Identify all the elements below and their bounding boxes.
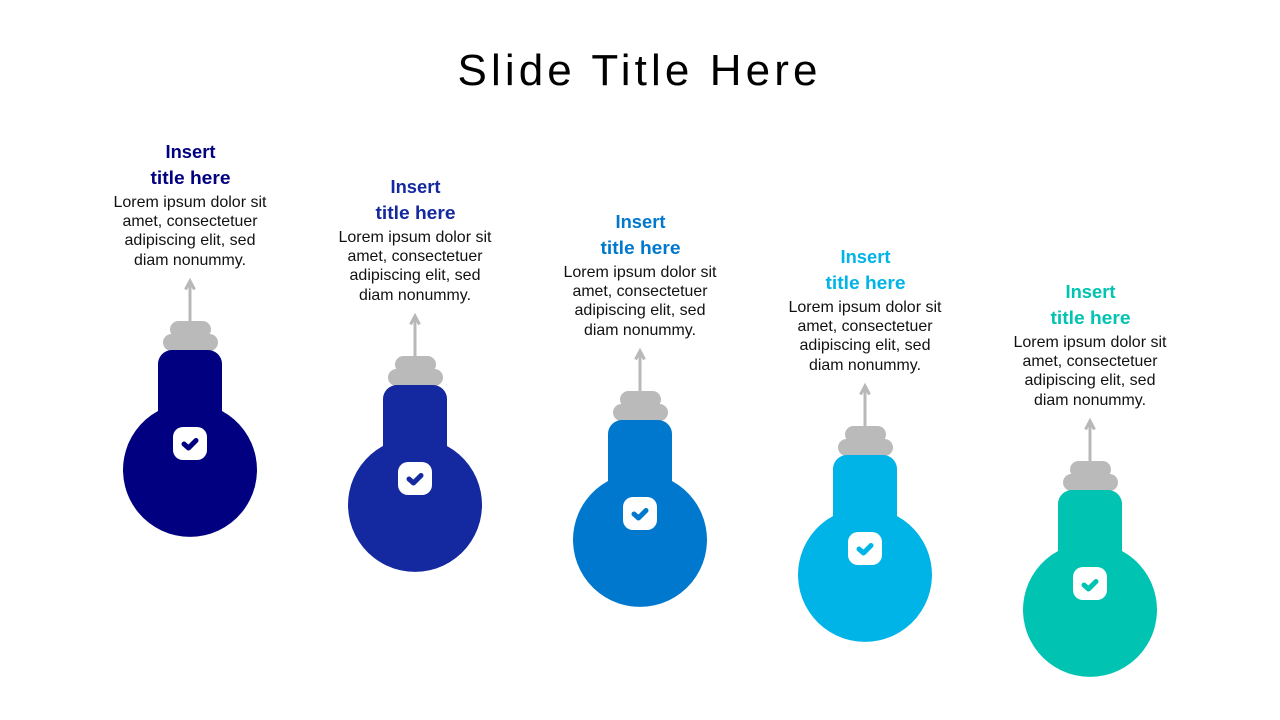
- icon: check badge 5: [1073, 567, 1107, 600]
- bulb cap 5: [1063, 461, 1118, 491]
- text block 3: [564, 264, 717, 339]
- arrow 4: [860, 386, 870, 427]
- bulb cap 2: [388, 356, 443, 386]
- text block 2: amet, consectetuer: [348, 248, 483, 265]
- bulb body 4: [798, 455, 932, 642]
- text block 3: Lorem ipsum dolor sit: [564, 264, 717, 281]
- text block 4: adipiscing elit, sed: [800, 337, 930, 354]
- text block 1: Lorem ipsum dolor sit: [114, 194, 267, 211]
- text block 2: adipiscing elit, sed: [350, 267, 480, 284]
- bulb body 3: [573, 420, 707, 607]
- text block 5: Lorem ipsum dolor sit: [1014, 334, 1167, 351]
- column 2: royal blue bulb: [338, 177, 492, 572]
- text block 4: diam nonummy.: [809, 357, 921, 374]
- heading 5: Insert: [1066, 282, 1116, 302]
- icon: check badge 3: [623, 497, 657, 530]
- column 5: teal bulb: [1014, 282, 1167, 677]
- heading 2: Insert: [390, 177, 440, 197]
- icon: check badge 4: [848, 532, 882, 565]
- text block 4: amet, consectetuer: [798, 318, 933, 335]
- arrow 5: [1086, 421, 1094, 462]
- icon: check badge 2: [398, 462, 432, 495]
- heading 3: [600, 212, 680, 258]
- heading 2: [376, 177, 456, 223]
- text block 5: amet, consectetuer: [1022, 353, 1158, 370]
- text block 2: Lorem ipsum dolor sit: [338, 229, 492, 246]
- arrow 1: [186, 281, 194, 322]
- text block 4: [788, 299, 942, 374]
- text block 5: [1014, 334, 1167, 409]
- text block 5: diam nonummy.: [1034, 392, 1146, 409]
- bulb body 5: [1023, 490, 1157, 677]
- heading 1: Insert: [166, 142, 216, 162]
- text block 2: diam nonummy.: [359, 287, 471, 304]
- text block 4: Lorem ipsum dolor sit: [788, 299, 942, 316]
- heading 1: title here: [150, 168, 230, 188]
- heading 3: title here: [600, 238, 680, 258]
- column 4: sky blue bulb: [788, 247, 942, 642]
- text block 5: adipiscing elit, sed: [1024, 372, 1156, 389]
- column 3: mid blue bulb: [564, 212, 717, 607]
- text block 1: amet, consectetuer: [122, 213, 258, 230]
- bulb body 2: [348, 385, 482, 572]
- heading 5: title here: [1050, 308, 1130, 328]
- heading 2: title here: [376, 203, 456, 223]
- bulb cap 3: [613, 391, 668, 421]
- arrow 3: [636, 351, 644, 392]
- text block 1: diam nonummy.: [134, 252, 246, 269]
- icon: check badge 1: [173, 427, 207, 460]
- text block 2: [338, 229, 492, 304]
- column 1: navy bulb: [114, 142, 267, 537]
- title: Slide Title Here: [458, 46, 818, 95]
- heading 4: Insert: [840, 247, 890, 267]
- bulb body 1: [123, 350, 257, 537]
- heading 1: [150, 142, 230, 188]
- text block 1: [114, 194, 267, 269]
- bulb cap 1: [163, 321, 218, 351]
- text block 3: adipiscing elit, sed: [574, 302, 706, 319]
- arrow 2: [410, 316, 420, 357]
- heading 4: [826, 247, 906, 293]
- text block 3: amet, consectetuer: [572, 283, 708, 300]
- text block 1: adipiscing elit, sed: [124, 232, 256, 249]
- heading 5: [1050, 282, 1130, 328]
- text block 3: diam nonummy.: [584, 322, 696, 339]
- heading 3: Insert: [616, 212, 666, 232]
- bulb cap 4: [838, 426, 893, 456]
- heading 4: title here: [826, 273, 906, 293]
